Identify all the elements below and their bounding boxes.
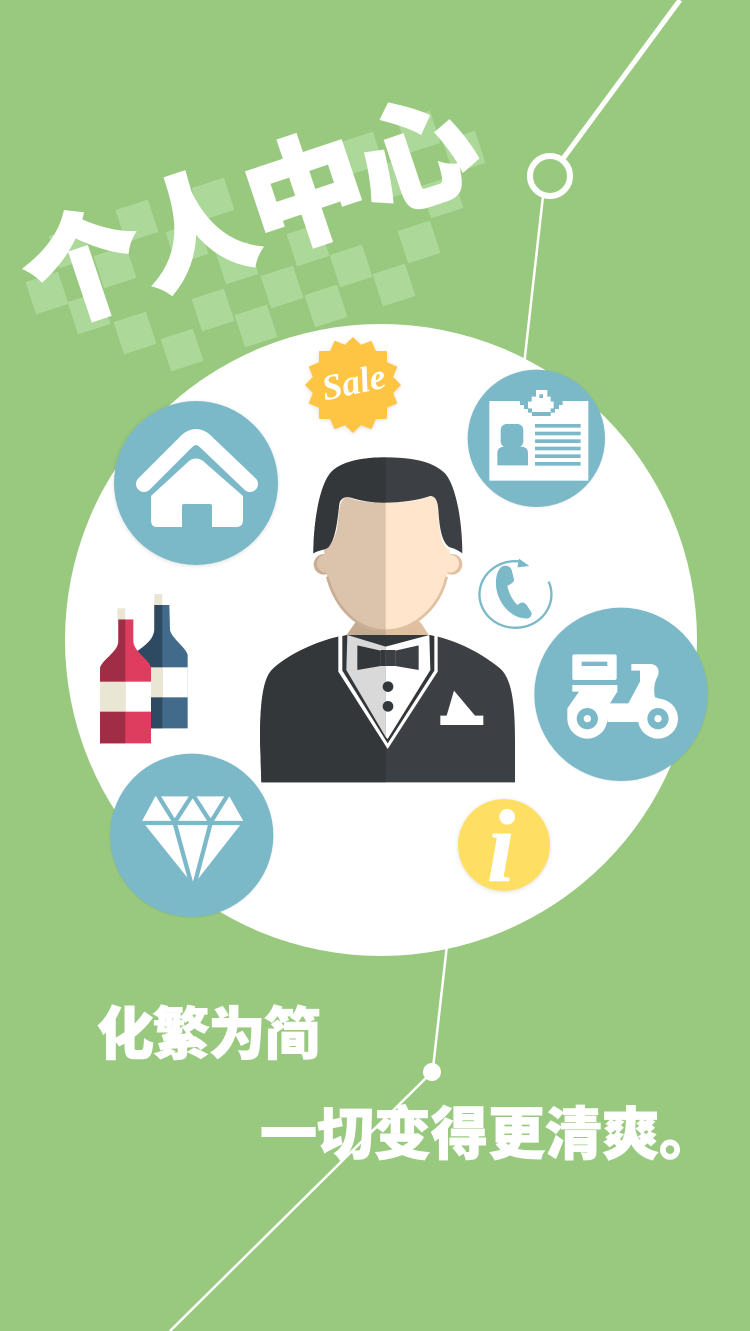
figure: waiter bbox=[260, 457, 515, 782]
icon: sale badge: Sale bbox=[318, 356, 389, 408]
bow tie bbox=[357, 645, 419, 670]
subtitle line 1: 化繁为简 bbox=[97, 1003, 321, 1067]
icon: info bbox=[458, 789, 550, 904]
connector lines and nodes bbox=[170, 0, 680, 1331]
suit bbox=[260, 637, 515, 782]
hair bbox=[313, 457, 462, 553]
checker squares behind title bbox=[26, 111, 485, 371]
face bbox=[324, 496, 450, 631]
white main circle bbox=[65, 324, 697, 956]
shirt bbox=[346, 635, 430, 739]
icon: sale badge bbox=[305, 337, 401, 433]
icon: phone bbox=[479, 559, 551, 628]
title: 个人中心 bbox=[8, 77, 494, 351]
ears bbox=[314, 554, 462, 575]
blue bottle bbox=[137, 594, 188, 728]
neck bbox=[347, 622, 430, 648]
red bottle bbox=[100, 608, 151, 743]
icon: info: i bbox=[487, 789, 516, 904]
icon: home bbox=[114, 401, 278, 565]
icon: id card bbox=[468, 370, 605, 507]
subtitle line 2: 一切变得更清爽。 bbox=[260, 1103, 716, 1167]
icon: scooter bbox=[534, 608, 708, 781]
icon: wine bottles bbox=[100, 594, 188, 743]
lapels bbox=[338, 635, 438, 749]
buttons bbox=[383, 681, 393, 712]
icon: diamond bbox=[110, 754, 273, 917]
pocket square bbox=[440, 691, 483, 725]
